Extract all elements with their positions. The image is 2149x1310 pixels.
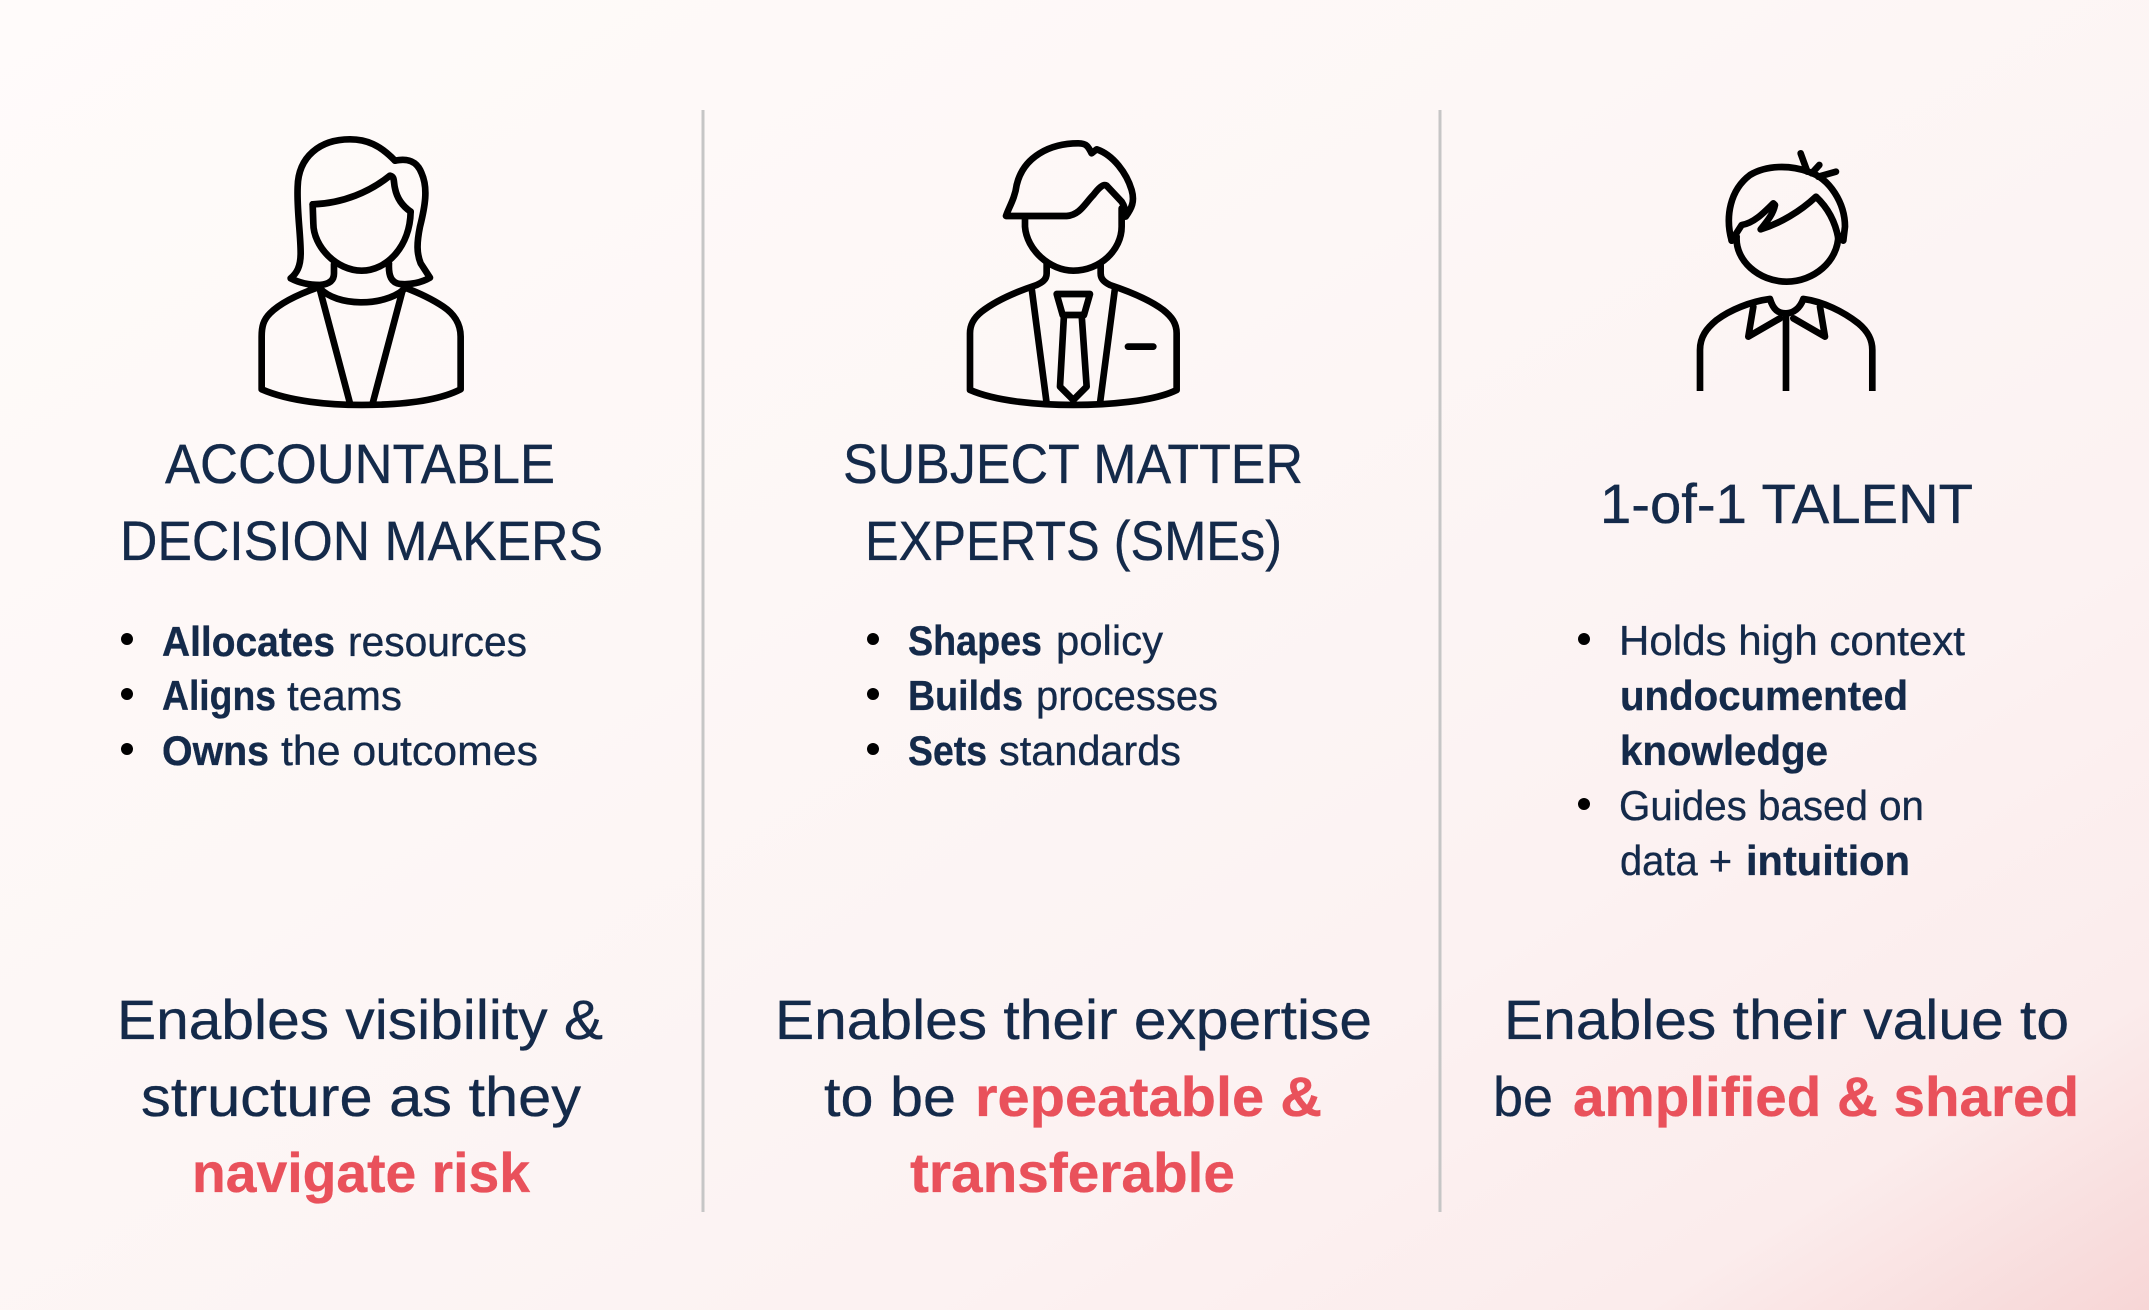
bullet list: 1-of-1 talent: intuition bbox=[1746, 837, 1910, 884]
icon: man in suit and tie bbox=[970, 143, 1177, 405]
panel: 1-of-1 talent bbox=[1493, 153, 2079, 1128]
bullet list: 1-of-1 talent bbox=[1578, 617, 1965, 884]
callout: repeatable and transferable: Enables their expertise bbox=[775, 988, 1372, 1051]
bullet list: accountable decision makers: teams bbox=[287, 672, 402, 719]
heading: accountable decision makers bbox=[120, 432, 603, 572]
bullet list: 1-of-1 talent: knowledge bbox=[1620, 727, 1828, 774]
bullet list: accountable decision makers bbox=[121, 618, 538, 774]
panel: accountable decision makers bbox=[117, 139, 603, 1204]
heading: subject matter experts: SUBJECT MATTER bbox=[843, 432, 1303, 495]
icon: woman in blazer bbox=[262, 139, 461, 405]
bullet list: accountable decision makers: Aligns bbox=[162, 672, 276, 719]
callout: amplified and shared: be bbox=[1493, 1065, 1553, 1128]
bullet list: accountable decision makers: resources bbox=[348, 618, 527, 665]
callout: repeatable and transferable bbox=[775, 988, 1372, 1204]
icon: young person with collared shirt bbox=[1700, 153, 1872, 391]
heading: accountable decision makers: DECISION MAKERS bbox=[120, 509, 603, 572]
bullet list: subject matter experts: processes bbox=[1036, 672, 1218, 719]
callout: navigate risk: structure as they bbox=[141, 1065, 581, 1128]
callout: repeatable and transferable: to be bbox=[824, 1065, 956, 1128]
callout: navigate risk bbox=[117, 988, 603, 1204]
heading: 1-of-1 talent: 1-of-1 TALENT bbox=[1600, 472, 1973, 535]
bullet list: subject matter experts: Shapes bbox=[908, 617, 1042, 664]
callout: navigate risk: navigate risk bbox=[192, 1141, 531, 1204]
callout: amplified and shared: Enables their value to bbox=[1504, 988, 2069, 1051]
bullet list: accountable decision makers: Allocates bbox=[162, 618, 335, 665]
heading: accountable decision makers: ACCOUNTABLE bbox=[165, 432, 555, 495]
heading: subject matter experts: EXPERTS (SMEs) bbox=[865, 509, 1282, 572]
panel: subject matter experts bbox=[775, 143, 1372, 1204]
callout: amplified and shared bbox=[1493, 988, 2079, 1128]
bullet list: subject matter experts: Sets bbox=[908, 727, 987, 774]
bullet list: accountable decision makers: Owns bbox=[162, 727, 269, 774]
bullet list: subject matter experts: standards bbox=[999, 727, 1181, 774]
heading: subject matter experts bbox=[843, 432, 1303, 572]
bullet list: 1-of-1 talent: Holds high context bbox=[1619, 617, 1965, 664]
callout: amplified and shared: amplified & shared bbox=[1573, 1065, 2079, 1128]
callout: repeatable and transferable: transferable bbox=[910, 1141, 1235, 1204]
bullet list: subject matter experts: Builds bbox=[908, 672, 1023, 719]
bullet list: accountable decision makers: the outcomes bbox=[281, 727, 538, 774]
bullet list: subject matter experts bbox=[867, 617, 1218, 774]
bullet list: 1-of-1 talent: data + bbox=[1620, 837, 1732, 884]
callout: navigate risk: Enables visibility & bbox=[117, 988, 603, 1051]
callout: repeatable and transferable: repeatable & bbox=[975, 1065, 1322, 1128]
bullet list: subject matter experts: policy bbox=[1056, 617, 1163, 664]
bullet list: 1-of-1 talent: undocumented bbox=[1620, 672, 1908, 719]
bullet list: 1-of-1 talent: Guides based on bbox=[1619, 782, 1924, 829]
